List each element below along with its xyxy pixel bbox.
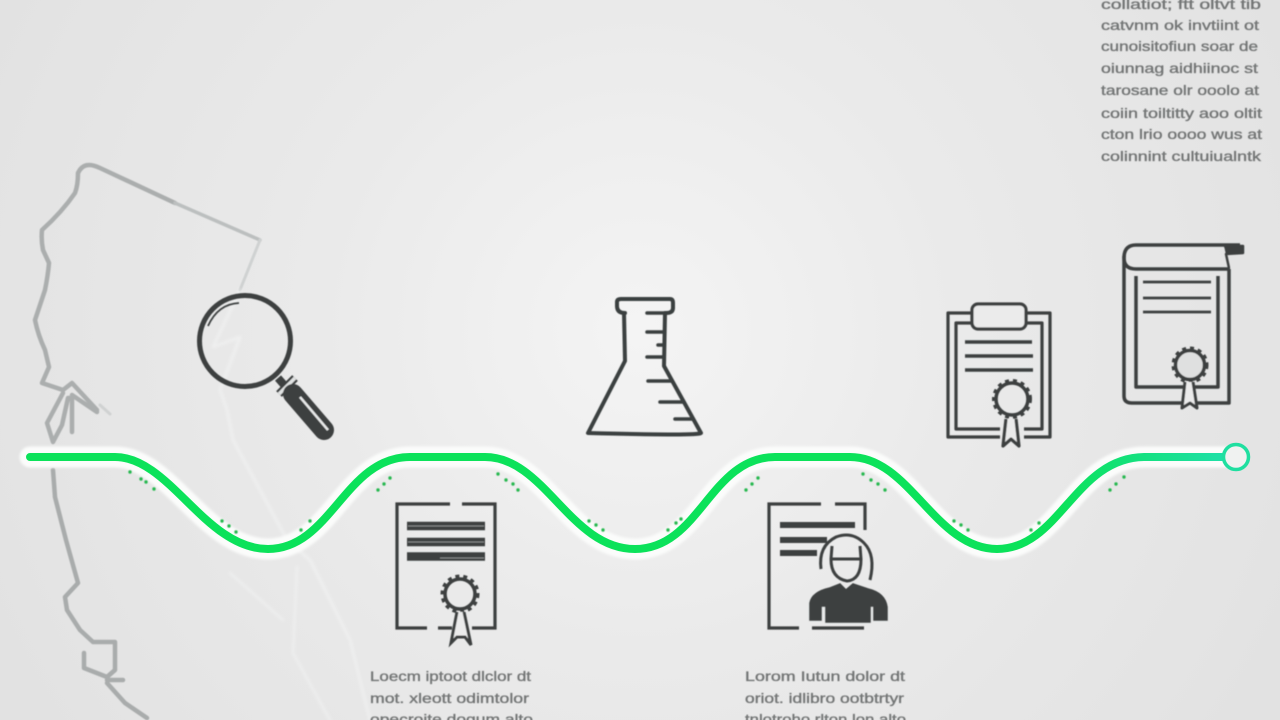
icon: book with seal [1124,245,1243,408]
icon: document with person [769,504,887,628]
person [821,535,872,580]
map: bay inlet [47,393,97,442]
timeline: white glow [30,457,1224,549]
text block: bottom right caption [745,668,906,720]
text block: top right: oiunnag aidhiinoc st [1101,60,1258,76]
text block: bottom left caption: Loecm iptoot dlclor dt [370,668,531,684]
map: border fading east [175,203,260,240]
timeline: green line [30,457,1224,549]
text block: top right: catvnm ok invtiint ot [1101,17,1259,33]
map: inland boundary lines [213,290,370,720]
text block: top right: cton lrio oooo wus at [1101,126,1262,142]
seal [1173,348,1207,382]
timeline curve [30,457,1224,549]
seal [442,576,478,612]
text block: top right: coiin toiltitty aoo oltit [1101,105,1262,121]
text block: top right: colinnint cultuiualntk [1101,148,1262,164]
text block: bottom right caption: oriot. idlibro ootbtrtyr [745,690,904,706]
icon: magnifying glass [200,296,328,430]
map: southern coast [53,470,147,718]
small green dots along curve [128,470,1126,534]
seal [994,380,1030,418]
text block: bottom left caption: mot. xleott odimtolor [370,690,529,706]
text block: bottom left caption [370,668,533,720]
map: northern border [35,165,175,410]
map outline: coastline background [35,165,370,720]
icon: certificate with seal [397,504,495,645]
timeline end marker [1224,444,1248,470]
text block: top right: cunoisitofiun soar de [1101,38,1258,54]
text block: top right [1101,0,1262,164]
text block: top right: tarosane olr ooolo at [1101,82,1259,98]
icon: clipboard with seal [948,304,1050,446]
text block: bottom right caption: Lorom Iutun dolor dt [745,668,905,684]
icon: flask [588,299,701,434]
